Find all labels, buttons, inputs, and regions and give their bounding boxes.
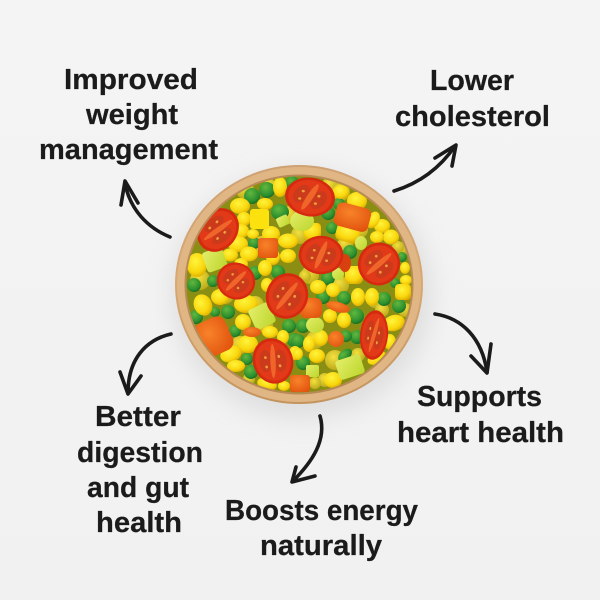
label: improved weight management: weight — [85, 99, 179, 131]
label: better digestion and gut health: digestion — [77, 437, 203, 469]
tomatoes — [198, 178, 400, 384]
peas — [187, 176, 407, 379]
label: improved weight management: Improved — [64, 64, 198, 96]
label: better digestion and gut health — [77, 401, 203, 539]
arrow: to weight management — [121, 181, 170, 237]
label: improved weight management: management — [39, 134, 219, 166]
corn — [187, 177, 412, 392]
olive corn filler — [190, 177, 412, 389]
arrow: to heart health — [435, 314, 491, 373]
label: supports heart health: heart health — [397, 417, 564, 449]
label: lower cholesterol: Lower — [430, 65, 514, 97]
label: boosts energy naturally: Boosts energy — [225, 495, 418, 527]
label: supports heart health — [397, 381, 564, 449]
bowl shadow — [172, 170, 432, 418]
carrots — [191, 201, 372, 392]
label: better digestion and gut health: and gut — [87, 472, 189, 504]
bowl — [175, 165, 423, 404]
label: improved weight management — [39, 64, 219, 166]
arrow: to better digestion — [120, 334, 171, 394]
label: supports heart health: Supports — [417, 381, 542, 413]
label: boosts energy naturally: naturally — [260, 530, 382, 562]
arrow: to energy — [292, 416, 322, 482]
vegetable mix — [187, 174, 412, 392]
label: boosts energy naturally — [225, 495, 418, 562]
arrow: to lower cholesterol — [394, 145, 456, 191]
label: better digestion and gut health: Better — [95, 401, 181, 433]
label: lower cholesterol — [395, 65, 550, 133]
yellow cube — [250, 209, 269, 229]
label: lower cholesterol: cholesterol — [395, 101, 550, 133]
lime pieces — [201, 211, 367, 381]
label: better digestion and gut health: health — [96, 507, 182, 539]
